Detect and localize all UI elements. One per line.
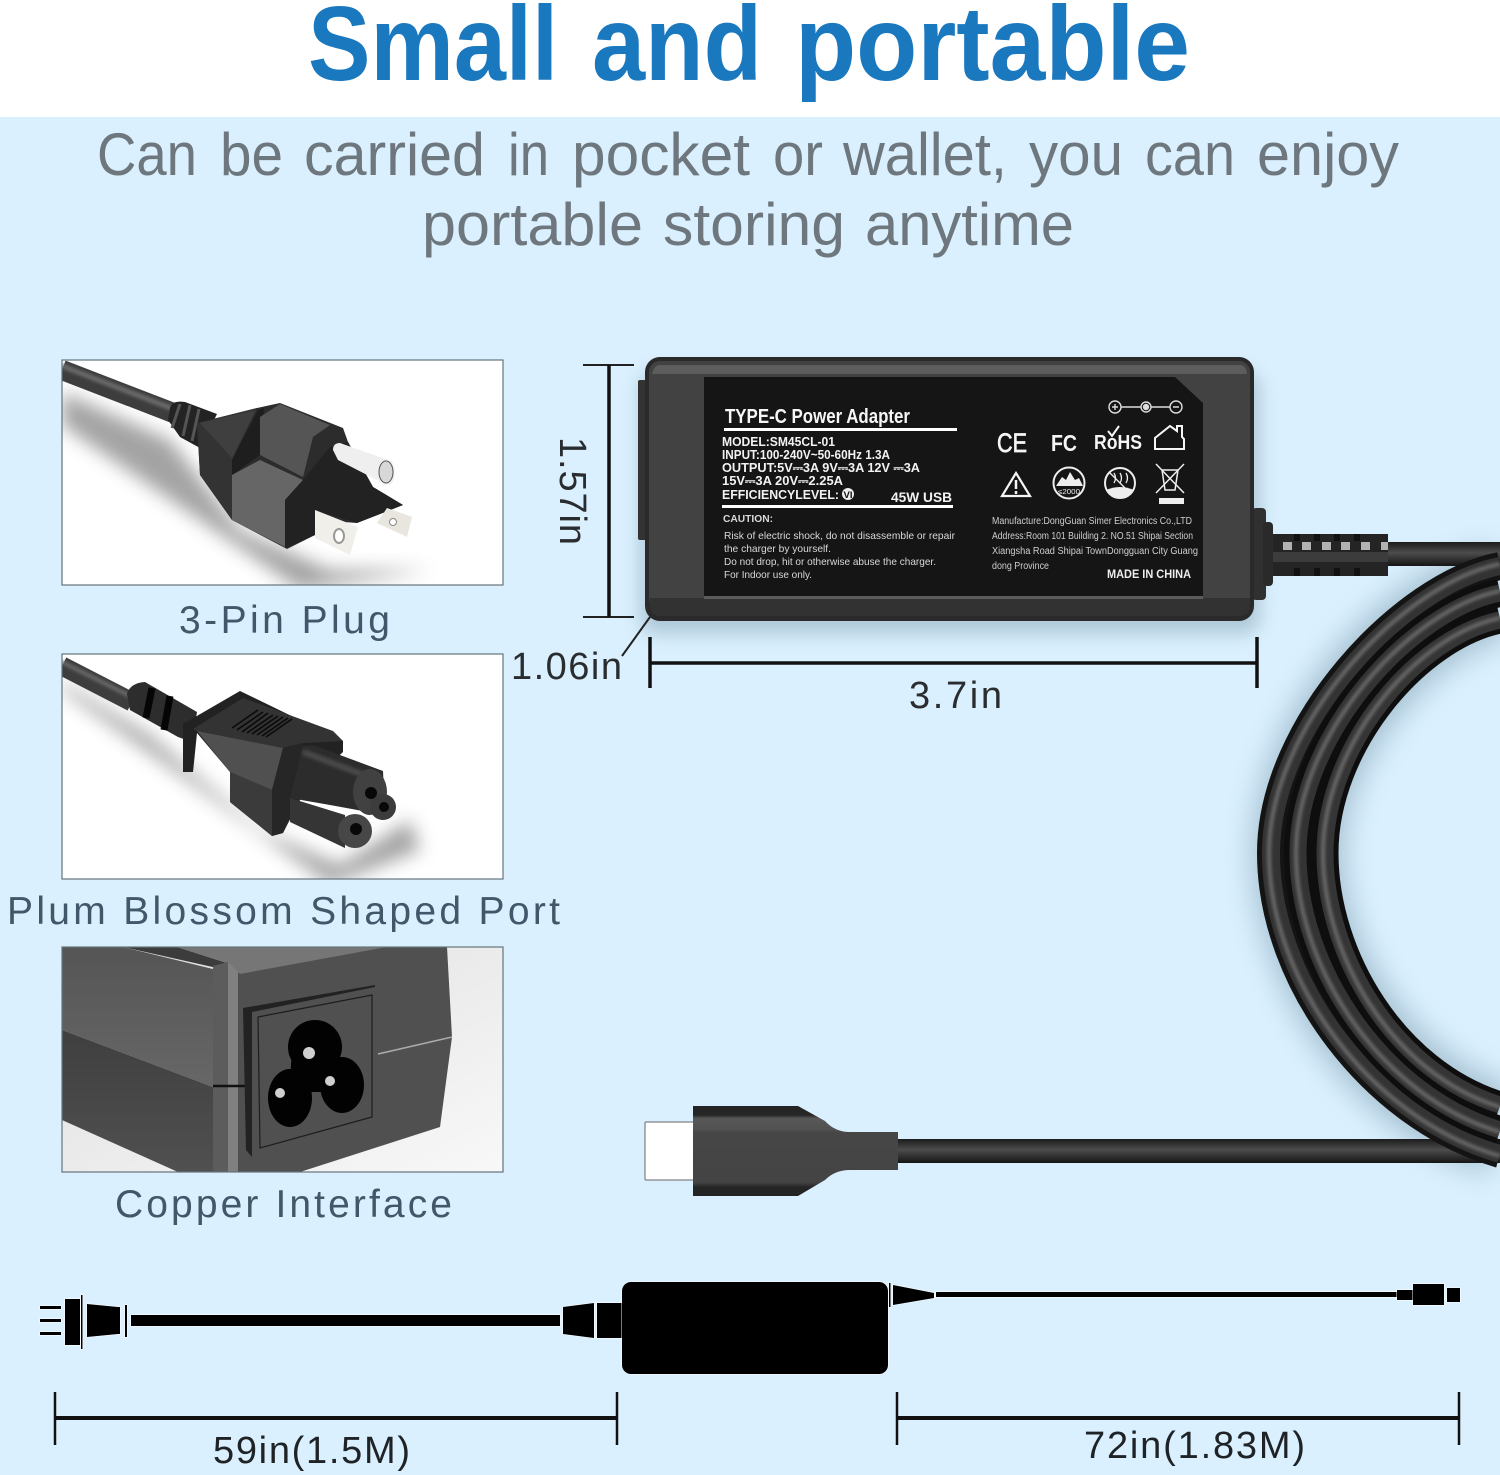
subtitle: wallet, [842,121,1007,188]
input cable [131,1315,560,1326]
dimension: 72in [897,1392,1459,1467]
dark plug face [285,442,403,548]
socket plate [258,995,372,1148]
label: plum blossom port: Plum Blossom Shaped Port [7,890,560,933]
connector body [183,691,343,836]
coiled cable [1269,564,1500,1156]
coil strand middle [1296,591,1500,1132]
icon: warning triangle [1002,473,1030,496]
input connector [563,1303,622,1338]
label title: TYPE-C Power Adapter [725,406,910,428]
title [308,0,1190,103]
manufacturer block: Manufacture:DongGuan Simer Electronics Co.,LTD [992,516,1192,527]
plug silhouette [40,1295,127,1349]
adapter silhouette [622,1282,888,1374]
plug shadow [62,392,430,590]
caution block: Risk of electric shock, do not disassemble or repair [724,530,955,542]
subtitle: in [508,121,549,188]
plug cable [62,370,176,414]
spec lines: OUTPUT:5V⎓3A 9V⎓3A 12V ⎓3A [722,461,920,475]
brick right face [230,947,452,1172]
socket face [353,769,387,815]
dimension: 59in [55,1392,617,1472]
icon: altitude [1054,468,1084,498]
power cord leaving adapter [1252,508,1500,600]
subtitle: storing [663,191,845,258]
subtitle: anytime [865,191,1074,258]
spec lines: INPUT:100-240V~50-60Hz 1.3A [722,448,890,462]
dimension: depth 1.06in [511,617,650,688]
brick lower left face [62,1030,213,1172]
connector shadow [62,682,420,885]
icon: altitude: ≤2000 [1058,489,1080,496]
subtitle [97,121,1399,258]
product label [704,377,1203,599]
brick upper left face [62,947,217,1087]
manufacturer block: dong Province [992,561,1049,572]
caution block: CAUTION: [723,513,773,525]
dimension: height 1.57in: 1.57in [551,437,593,545]
panel border [62,947,503,1172]
dimension: width 3.7in: 3.7in [909,675,1002,717]
icon: CE mark: CE [997,428,1027,458]
manufacturer block [992,516,1198,572]
spec lines: 15V⎓3A 20V⎓2.25A [722,474,843,488]
subtitle: enjoy [1257,121,1399,188]
subtitle: can [1145,121,1235,188]
output cable [936,1292,1397,1297]
icon: FC mark: FC [1051,430,1077,456]
spec lines: EFFICIENCYLEVEL: [722,488,839,502]
output strain relief [889,1283,934,1307]
vent grille [232,710,292,737]
spec lines: MODEL:SM45CL-01 [722,435,835,449]
icon: tropical climate [1105,468,1135,498]
dimension: 59in: 59in(1.5M) [213,1430,410,1472]
subtitle: Can [97,121,197,188]
label: 3-pin plug: 3-Pin Plug [179,599,390,642]
caution block [723,513,955,581]
subtitle: carried [304,121,485,188]
socket holes [288,1020,342,1060]
manufacturer block: Xiangsha Road Shipai TownDongguan City Guang [992,546,1198,557]
subtitle: portable [422,191,643,258]
icon: polarity [1109,401,1182,413]
flat blades [315,510,358,555]
pins [303,1047,315,1059]
panel: plum blossom port photo [62,654,503,885]
product label: MADE IN CHINA [1107,567,1191,581]
label: copper interface: Copper Interface [115,1183,452,1226]
coil strand inner [1323,618,1500,1107]
icon: WEEE bin [1156,464,1184,504]
lower socket barrel [290,798,345,848]
product label: VI [844,490,852,500]
icon: house [1155,426,1184,449]
adapter brick [638,357,1254,621]
coil strand outer [1269,564,1500,1156]
top socket barrel [300,746,384,810]
connector strain relief [127,682,197,742]
adapter shadow [640,372,1260,634]
upper face [260,404,330,477]
panel: 3-pin plug photo [62,360,503,590]
plug body [197,403,403,549]
dimension: height 1.57in [551,365,634,617]
brick top edge [123,947,227,968]
dimension: depth 1.06in: 1.06in [511,646,622,688]
subtitle: be [220,121,283,188]
panel border [62,654,503,879]
full-length cable diagram [40,1282,1460,1374]
socket recess [243,985,375,1157]
corner column [213,962,228,1172]
caution block: the charger by yourself. [724,543,831,555]
subtitle: you [1029,121,1123,188]
product label: 45W USB [891,489,952,505]
round pin [333,443,395,485]
spec lines [722,435,920,502]
connector cable [62,666,132,702]
strain relief [168,402,217,448]
panel border [62,360,503,585]
dimension: width 3.7in [650,637,1257,717]
DC connector [1397,1284,1460,1305]
lower front block [232,460,303,547]
coil shadow [1298,593,1500,1130]
icon: RoHS mark: RoHS [1094,432,1142,454]
dimension: 72in: 72in(1.83M) [1084,1425,1305,1467]
caution block: Do not drop, hit or otherwise abuse the charger. [724,556,936,568]
manufacturer block: Address:Room 101 Building 2. NO.51 Shipai Section [992,531,1193,542]
subtitle: pocket [572,121,750,188]
subtitle: or [773,121,823,188]
panel: copper interface photo [62,947,503,1172]
caution block: For Indoor use only. [724,569,812,581]
USB-C connector and cable [645,1106,1500,1196]
